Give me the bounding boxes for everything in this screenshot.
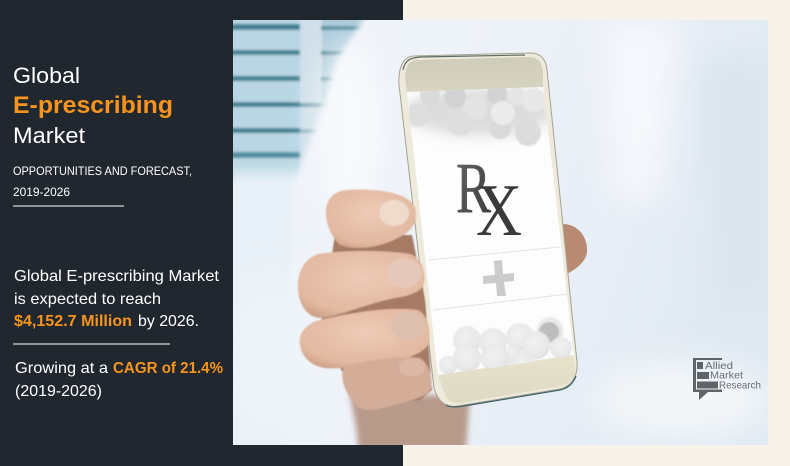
background: cream right panel bbox=[403, 0, 790, 466]
top pills bbox=[406, 84, 546, 146]
screen content bbox=[405, 84, 572, 376]
CAGR statement: Growing at a bbox=[15, 360, 108, 377]
thumb nail bbox=[379, 200, 409, 226]
background: dark left panel bbox=[0, 0, 403, 466]
market value statement: is expected to reach bbox=[14, 291, 161, 308]
phone body bbox=[399, 53, 577, 406]
market value statement: Global E-prescribing Market bbox=[14, 268, 220, 285]
ring nail bbox=[399, 358, 425, 376]
coat folds bbox=[295, 26, 765, 441]
photo: doctor holding smartphone bbox=[225, 15, 775, 450]
title bbox=[13, 63, 173, 148]
logo text: Allied bbox=[705, 360, 733, 372]
CAGR statement: CAGR of 21.4% bbox=[113, 360, 223, 377]
subtitle bbox=[13, 164, 192, 199]
fingers in front of phone bbox=[298, 190, 432, 410]
smartphone bbox=[399, 53, 577, 407]
plus symbol bbox=[483, 260, 514, 296]
Rx symbol bbox=[457, 164, 521, 235]
phone screen bbox=[407, 87, 574, 376]
middle finger bbox=[300, 309, 430, 368]
back finger bbox=[563, 224, 588, 274]
middle nail bbox=[391, 312, 425, 340]
market value statement: $4,152.7 Million bbox=[14, 313, 132, 330]
Rx symbol: X bbox=[476, 170, 522, 252]
phone top beige band bbox=[405, 57, 543, 92]
title: Market bbox=[13, 123, 85, 148]
bottom pills bbox=[439, 317, 572, 376]
title: E-prescribing bbox=[13, 92, 173, 119]
logo: Allied Market Research: Research bbox=[719, 380, 761, 392]
index nail bbox=[386, 258, 422, 288]
dividers bbox=[429, 247, 568, 310]
thumb bbox=[326, 190, 416, 248]
logo: Allied Market Research bbox=[693, 358, 761, 400]
index finger bbox=[298, 251, 424, 318]
logo: Allied Market Research: Market bbox=[710, 370, 743, 382]
hand shadow between fingers bbox=[320, 235, 432, 405]
white coat bbox=[297, 20, 375, 184]
window blinds bbox=[233, 20, 366, 181]
photo backdrop bbox=[233, 182, 297, 445]
market value statement bbox=[14, 268, 220, 330]
market value statement: by 2026. bbox=[138, 313, 199, 330]
subtitle: OPPORTUNITIES AND FORECAST, bbox=[13, 164, 192, 178]
CAGR statement: (2019-2026) bbox=[15, 383, 102, 400]
top pills shadow bbox=[405, 88, 555, 136]
ring finger bbox=[342, 357, 432, 410]
phone bottom beige band bbox=[438, 355, 575, 403]
subtitle: 2019-2026 bbox=[13, 185, 70, 199]
palm and wrist bbox=[350, 395, 470, 450]
lower left fade bbox=[233, 166, 300, 184]
Rx symbol: R bbox=[456, 148, 491, 228]
CAGR statement bbox=[15, 360, 223, 400]
hand behind phone bbox=[350, 224, 587, 450]
title: Global bbox=[13, 63, 80, 88]
logo icon bbox=[693, 358, 722, 400]
phone top edge bbox=[403, 55, 525, 70]
phone bottom edge bbox=[446, 376, 576, 407]
